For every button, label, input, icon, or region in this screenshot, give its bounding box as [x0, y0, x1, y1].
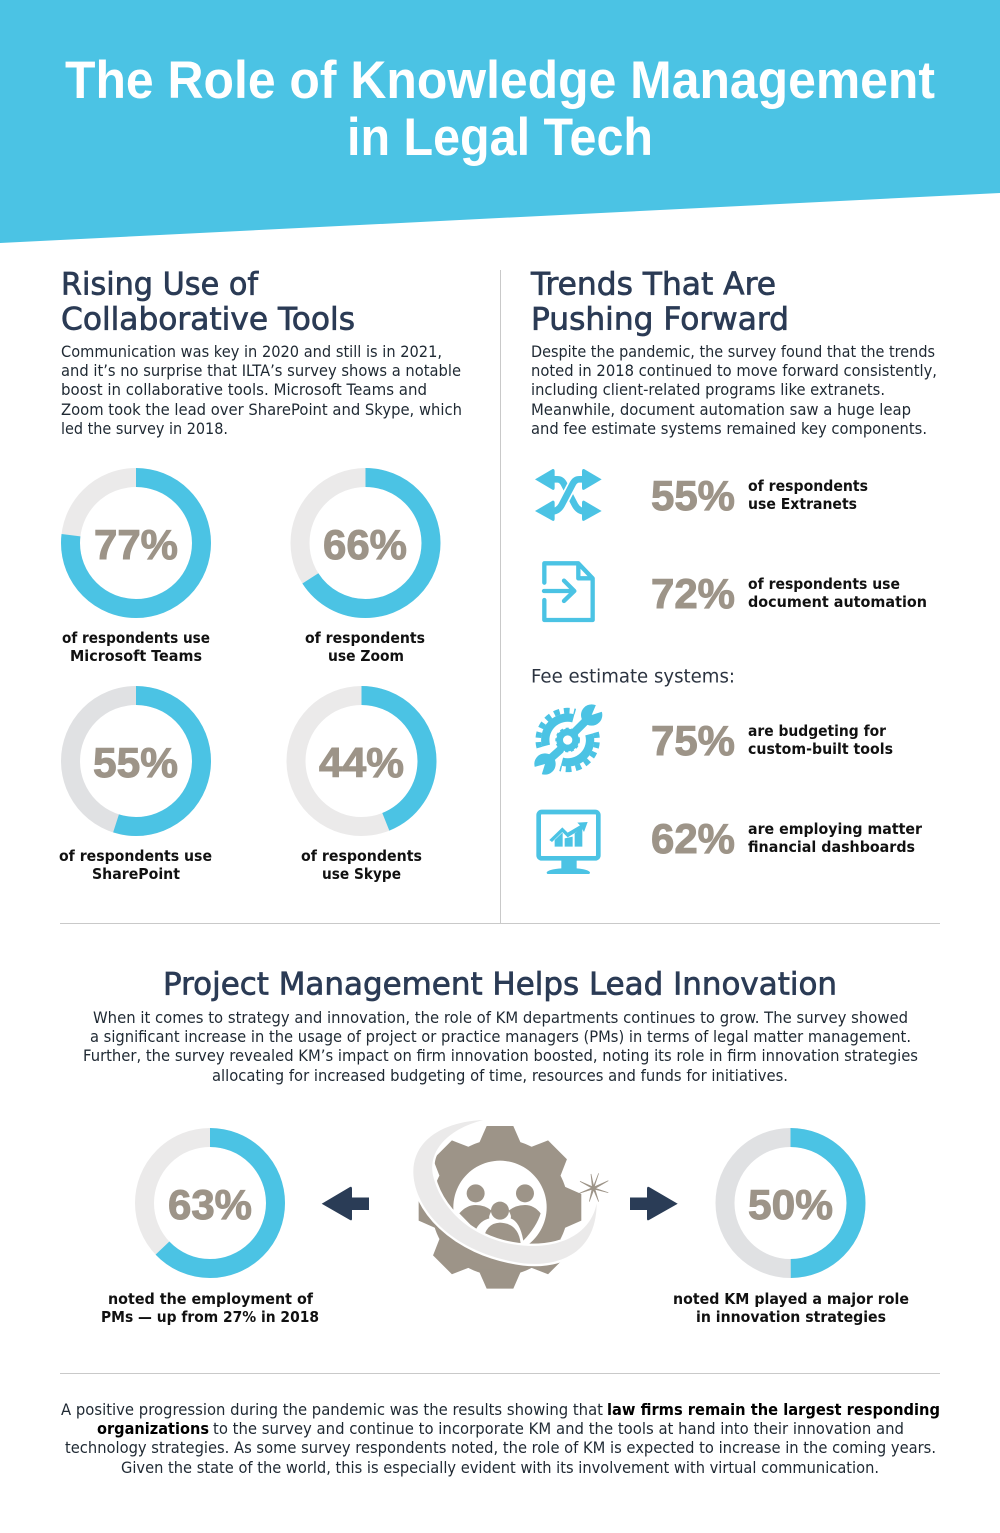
text block: project management intro: When it comes to strategy and innovation, the role of KM departments continues to grow. The survey showed: [93, 1008, 908, 1027]
text block: closing paragraph: technology strategies. As some survey respondents noted, the role of KM is expected to increase in the coming years.: [65, 1438, 936, 1457]
panel: project management: [83, 966, 918, 1326]
panel: trends pushing forward: [529, 266, 937, 874]
heading: trends: [530, 266, 789, 338]
donut: Microsoft Teams 77%: Microsoft Teams: [70, 647, 202, 665]
stat: 62% financial dashboards: financial dashboards: [748, 838, 915, 856]
text block: closing paragraph: A positive progression during the pandemic was the results showing that: [61, 1400, 603, 1419]
heading: project management: Project Management Helps Lead Innovation: [163, 966, 837, 1002]
heading: trends: Pushing Forward: [531, 302, 789, 338]
subheading: fee estimate systems: Fee estimate systems:: [531, 666, 735, 688]
people: [459, 1184, 541, 1247]
icon: gear with people and orbit: [413, 1120, 608, 1289]
text block: trends intro: [531, 342, 937, 438]
heading: rising use: Rising Use of: [61, 266, 259, 302]
gear: [419, 1126, 581, 1289]
text block: project management intro: Further, the survey revealed KM’s impact on firm innovation boosted, noting its role in firm innovation strategies: [83, 1046, 918, 1065]
heading: rising use: Collaborative Tools: [61, 302, 355, 338]
donut: Zoom 66%: of respondents: [305, 629, 425, 647]
stat: 62% financial dashboards: 62%: [651, 815, 735, 862]
arrow: left: [322, 1187, 369, 1220]
donut: SharePoint 55%: 55%: [93, 739, 178, 786]
stat: 62% financial dashboards: [651, 815, 922, 862]
donut: SharePoint 55%: of respondents use: [59, 847, 212, 865]
stat: 55% extranets: [651, 472, 868, 519]
text block: trends intro: Meanwhile, document automation saw a huge leap: [531, 400, 911, 419]
text block: collaborative tools intro: Communication was key in 2020 and still is in 2021,: [61, 342, 442, 361]
title: in Legal Tech: [347, 108, 653, 167]
donut: PM employment 63%: [101, 1138, 319, 1326]
text block: trends intro: including client-related programs like extranets.: [531, 380, 885, 399]
stat: 75% custom-built tools: 75%: [651, 717, 735, 764]
text block: collaborative tools intro: boost in collaborative tools. Microsoft Teams and: [61, 380, 427, 399]
star sparkle: [579, 1173, 608, 1202]
donut: KM innovation role 50%: in innovation strategies: [696, 1308, 886, 1326]
stat: 75% custom-built tools: custom-built tools: [748, 740, 893, 758]
donut: SharePoint 55%: SharePoint: [92, 865, 181, 883]
donut: Zoom 66%: use Zoom: [328, 647, 404, 665]
heading: rising use: [61, 266, 355, 338]
icon: gears and wrenches: [529, 702, 607, 780]
text block: project management intro: [83, 1008, 918, 1085]
text block: collaborative tools intro: and it’s no surprise that ILTA’s survey shows a notable: [61, 361, 461, 380]
icon: monitor with chart: [539, 812, 598, 874]
donut: SharePoint 55%: [59, 696, 212, 883]
text block: collaborative tools intro: [61, 342, 462, 438]
panel: rising use of collaborative tools: [59, 266, 462, 883]
donut: Zoom 66%: [300, 478, 431, 665]
donut: Skype 44%: 44%: [319, 739, 404, 786]
donut: PM employment 63%: 63%: [168, 1181, 252, 1228]
donut: Microsoft Teams 77%: of respondents use: [62, 629, 210, 647]
donut: Microsoft Teams 77%: [62, 478, 210, 665]
text block: collaborative tools intro: led the survey in 2018.: [61, 419, 228, 438]
text block: trends intro: and fee estimate systems remained key components.: [531, 419, 927, 438]
text block: closing paragraph: to the survey and continue to incorporate KM and the tools at hand into their innovation and: [213, 1419, 904, 1438]
donut: KM innovation role 50%: 50%: [748, 1181, 833, 1228]
text block: closing paragraph: Given the state of the world, this is especially evident with its involvement with virtual communication.: [121, 1458, 879, 1477]
stat: 72% document automation: of respondents use: [748, 575, 900, 593]
heading: trends: Trends That Are: [530, 266, 776, 302]
stat: 62% financial dashboards: are employing matter: [748, 820, 922, 838]
stat: 55% extranets: 55%: [651, 472, 735, 519]
stat: 75% custom-built tools: are budgeting for: [748, 722, 886, 740]
text block: project management intro: a significant increase in the usage of project or practice managers (PMs) in terms of legal matter management.: [90, 1027, 911, 1046]
text block: trends intro: Despite the pandemic, the survey found that the trends: [531, 342, 935, 361]
icon: document with arrow: [544, 563, 593, 620]
donut: PM employment 63%: noted the employment of: [108, 1290, 313, 1308]
title: [65, 51, 935, 167]
donut: KM innovation role 50%: noted KM played a major role: [673, 1290, 909, 1308]
stat: 75% custom-built tools: [651, 717, 893, 764]
arrow: right: [630, 1187, 678, 1220]
stat: 72% document automation: document automation: [748, 593, 927, 611]
donut: Skype 44%: [296, 696, 427, 883]
text block: closing paragraph: [61, 1400, 940, 1477]
text block: trends intro: noted in 2018 continued to move forward consistently,: [531, 361, 937, 380]
title: The Role of Knowledge Management: [65, 51, 935, 110]
stat: 72% document automation: [651, 570, 927, 617]
stat: 72% document automation: 72%: [651, 570, 735, 617]
text block: closing paragraph: organizations: [97, 1419, 209, 1438]
stat: 55% extranets: of respondents: [748, 477, 868, 495]
donut: Skype 44%: use Skype: [322, 865, 401, 883]
donut: PM employment 63%: PMs — up from 27% in 2018: [101, 1308, 319, 1326]
donut: KM innovation role 50%: [673, 1138, 909, 1326]
icon: crossing arrows: [535, 469, 602, 521]
text block: project management intro: allocating for increased budgeting of time, resources and funds for initiatives.: [212, 1066, 788, 1085]
header banner: [0, 0, 1000, 243]
donut: Zoom 66%: 66%: [323, 521, 407, 568]
donut: Skype 44%: of respondents: [301, 847, 422, 865]
donut: Microsoft Teams 77%: 77%: [94, 521, 178, 568]
text block: collaborative tools intro: Zoom took the lead over SharePoint and Skype, which: [61, 400, 462, 419]
text block: closing paragraph: law firms remain the largest responding: [607, 1400, 940, 1419]
stat: 55% extranets: use Extranets: [748, 495, 857, 513]
orbit swoosh: [413, 1120, 597, 1264]
